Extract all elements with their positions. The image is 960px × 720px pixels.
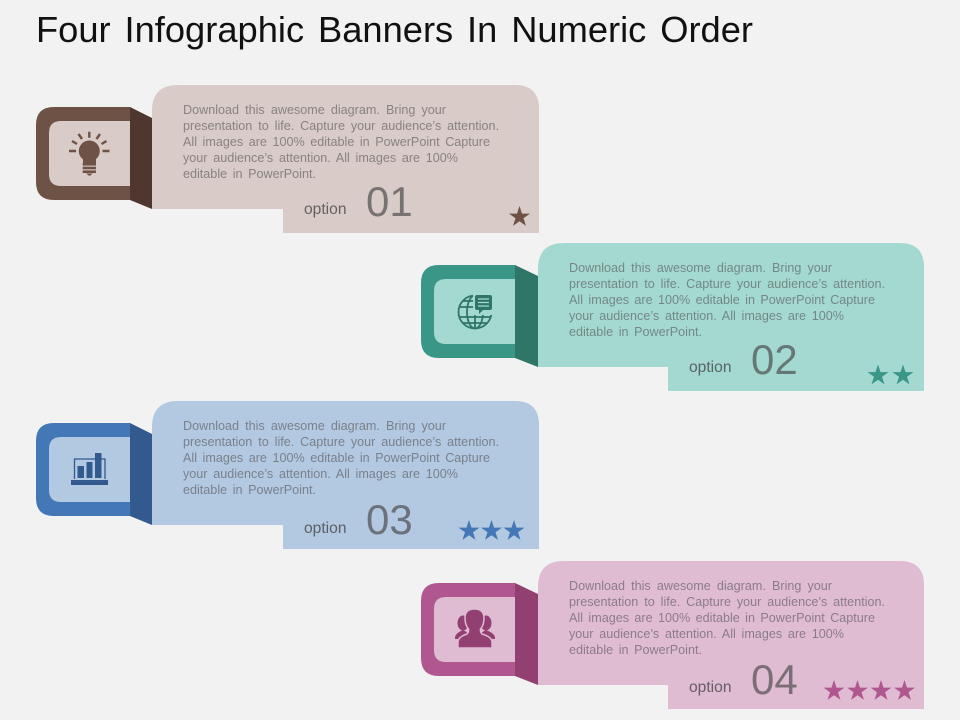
icon holder 02 [421, 265, 515, 358]
body text 04: your audience’s attention. All images are 100% [569, 627, 844, 641]
option label 02: option [689, 359, 732, 376]
panel body 02 [538, 243, 924, 391]
star rating 03 [458, 520, 524, 540]
body text 04: Download this awesome diagram. Bring your [569, 579, 832, 593]
body text 03: All images are 100% editable in PowerPoint Capture [183, 451, 490, 465]
icon: laptop with bar chart [71, 453, 108, 485]
body text 03: presentation to life. Capture your audience’s attention. [183, 435, 499, 449]
icon holder 04 [421, 583, 515, 676]
banner 01 [36, 85, 539, 233]
banner 03 [36, 401, 539, 549]
body text 04: presentation to life. Capture your audience’s attention. [569, 595, 885, 609]
body text 01: editable in PowerPoint. [183, 167, 316, 181]
icon inset 04 [434, 597, 515, 662]
banner 01 shapes [36, 85, 539, 233]
body text 01: your audience’s attention. All images are 100% [183, 151, 458, 165]
number 04: 04 [751, 656, 798, 703]
body text 02: All images are 100% editable in PowerPoint Capture [569, 293, 875, 307]
star rating 02 [868, 364, 914, 384]
banner 04 shapes [421, 561, 924, 709]
number 03: 03 [366, 496, 413, 543]
banner 02 shapes [421, 243, 924, 391]
body text 04 [569, 579, 885, 657]
body text 02: your audience’s attention. All images are 100% [569, 309, 844, 323]
title: Four Infographic Banners In Numeric Order [36, 9, 753, 50]
option label 03: option [304, 520, 346, 537]
icon inset 01 [49, 121, 130, 186]
body text 04: editable in PowerPoint. [569, 643, 702, 657]
panel body 04 [538, 561, 924, 709]
banner 02 [421, 243, 924, 391]
body text 01: Download this awesome diagram. Bring your [183, 103, 446, 117]
option label 01: option [304, 201, 346, 218]
body text 03: editable in PowerPoint. [183, 483, 316, 497]
body text 01: All images are 100% editable in PowerPoint Capture [183, 135, 490, 149]
icon: group of people [455, 609, 495, 648]
body text 02: editable in PowerPoint. [569, 325, 702, 339]
banner 04 [421, 561, 924, 709]
icon: globe with speech bubble [458, 293, 494, 328]
icon inset 02 [434, 279, 515, 344]
star rating 04 [824, 680, 915, 700]
body text 04: All images are 100% editable in PowerPoint Capture [569, 611, 875, 625]
star rating 01 [509, 206, 530, 226]
option label 04: option [689, 679, 732, 696]
body text 02: Download this awesome diagram. Bring your [569, 261, 832, 275]
body text 01 [183, 103, 499, 181]
fold 02 [515, 265, 538, 367]
icon inset 03 [49, 437, 130, 502]
fold 03 [130, 423, 152, 525]
body text 02: presentation to life. Capture your audience’s attention. [569, 277, 885, 291]
panel body 03 [152, 401, 539, 549]
body text 02 [569, 261, 885, 339]
icon: light bulb [69, 132, 110, 176]
body text 03: Download this awesome diagram. Bring your [183, 419, 446, 433]
panel body 01 [152, 85, 539, 233]
body text 03 [183, 419, 499, 497]
number 02: 02 [751, 336, 798, 383]
body text 01: presentation to life. Capture your audience’s attention. [183, 119, 499, 133]
fold 01 [130, 107, 152, 209]
banner 03 shapes [36, 401, 539, 549]
icon holder 01 [36, 107, 130, 200]
body text 03: your audience’s attention. All images are 100% [183, 467, 458, 481]
fold 04 [515, 583, 538, 685]
icon holder 03 [36, 423, 130, 516]
number 01: 01 [366, 178, 413, 225]
